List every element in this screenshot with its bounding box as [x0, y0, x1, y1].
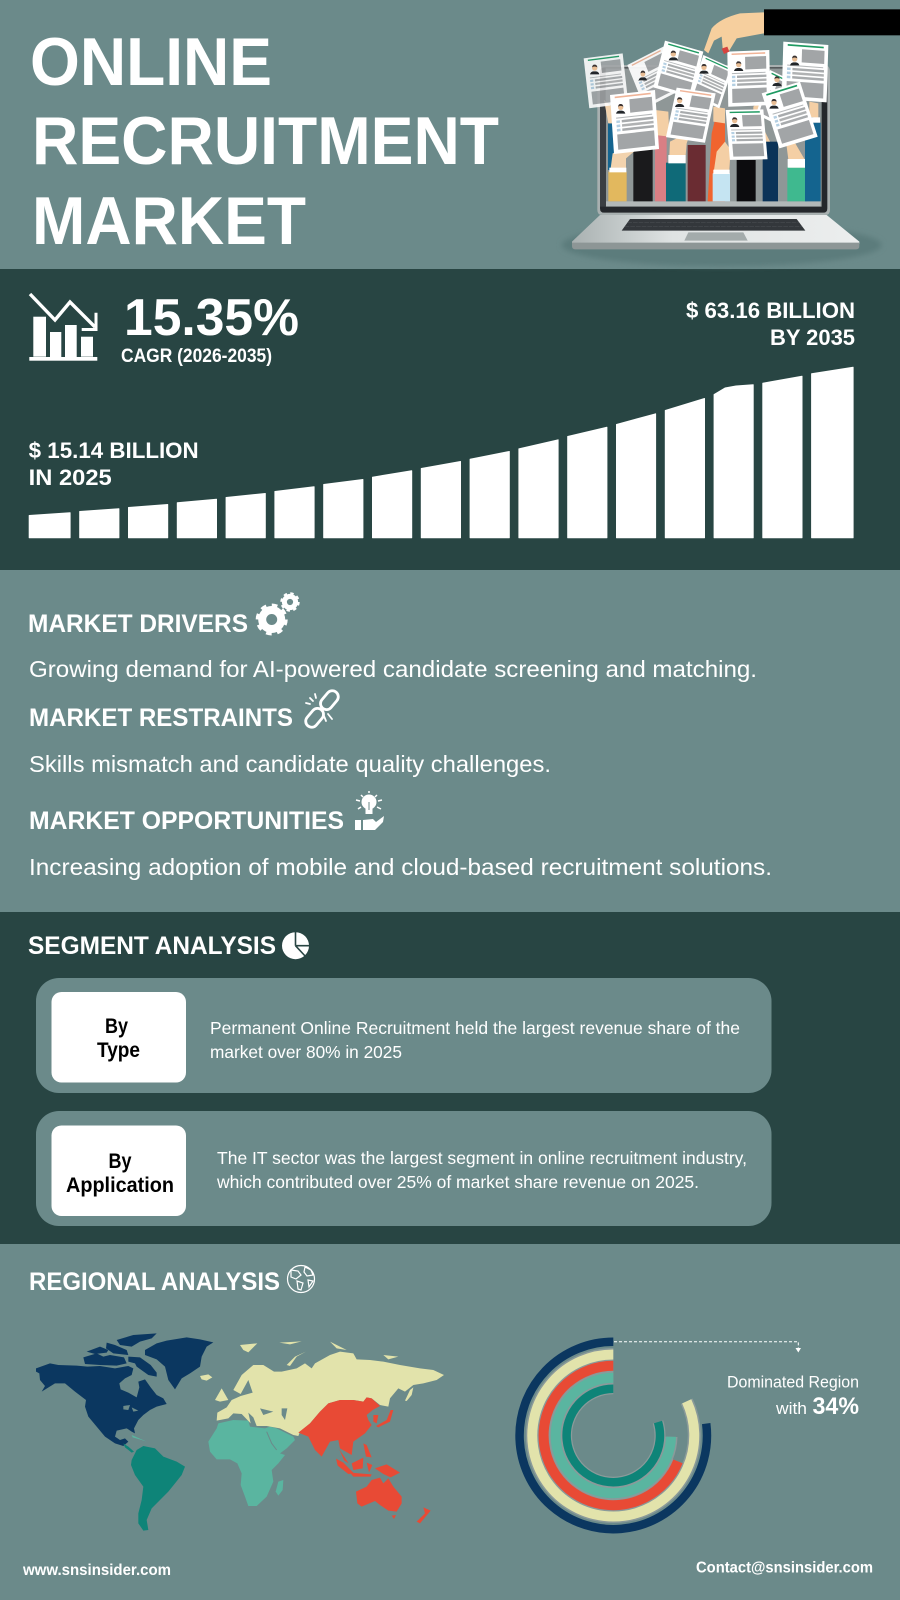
label box: by type: By	[105, 1015, 128, 1038]
heading: market opportunities: MARKET OPPORTUNITIES	[29, 807, 344, 835]
region: Asia Pacific	[298, 1397, 431, 1523]
heading: regional analysis: REGIONAL ANALYSIS	[29, 1268, 280, 1296]
heading: segment analysis: SEGMENT ANALYSIS	[28, 932, 276, 960]
icon: lightbulb in hand	[355, 791, 384, 830]
stat: CAGR: CAGR (2026-2035)	[121, 346, 272, 367]
callout: dominated region: Dominated Region	[727, 1372, 859, 1392]
title: ONLINE	[30, 24, 272, 100]
callout: dominated region: with	[775, 1399, 807, 1418]
label: 2035 market size: $ 63.16 BILLION	[686, 298, 855, 323]
label box: by application: By	[108, 1150, 132, 1173]
text: by type description	[210, 1018, 740, 1062]
label box: by application	[52, 1126, 186, 1216]
dark band: segment analysis	[0, 912, 900, 1244]
title: MARKET	[32, 183, 306, 259]
illustration: laptop with hands holding CVs	[562, 9, 900, 266]
region: Europe and Northern Asia	[200, 1341, 444, 1436]
label: 2035 market size	[686, 298, 855, 350]
ring: Europe	[532, 1354, 694, 1517]
panel: by application	[36, 1111, 772, 1226]
heading: market drivers: MARKET DRIVERS	[28, 610, 248, 638]
icon: gears	[258, 594, 298, 634]
radial bar chart: regional share	[520, 1342, 707, 1529]
icon: globe	[288, 1266, 314, 1292]
callout: dominated region: 34%	[812, 1393, 859, 1420]
text: market opportunity: Increasing adoption of mobile and cloud-based recruitment solutions.	[29, 854, 772, 880]
ring: Asia Pacific	[544, 1366, 678, 1505]
ring: South America	[567, 1389, 660, 1482]
footer: contact: Contact@snsinsider.com	[696, 1560, 873, 1576]
world map	[36, 1333, 444, 1531]
icon: broken chain	[303, 688, 341, 730]
label: 2025 market size: IN 2025	[29, 465, 112, 490]
label: 2025 market size	[29, 438, 199, 490]
footer: website: www.snsinsider.com	[22, 1562, 171, 1579]
label box: by type: Type	[97, 1039, 140, 1062]
text: market restraint: Skills mismatch and candidate quality challenges.	[29, 751, 551, 777]
text: by type description: Permanent Online Recruitment held the largest revenue share of the	[210, 1018, 740, 1038]
icon: pie chart	[282, 930, 311, 959]
label box: by type	[52, 992, 186, 1082]
stat: CAGR: 15.35%	[124, 289, 299, 347]
title: RECRUITMENT	[32, 103, 499, 179]
title	[30, 24, 499, 259]
region: Africa and Middle East	[132, 1420, 295, 1506]
panel: by type	[36, 978, 772, 1093]
label box: by application: Application	[66, 1174, 174, 1197]
dark band: market size	[0, 269, 900, 570]
ring: North America	[520, 1342, 707, 1529]
callout: dominated region	[727, 1372, 859, 1420]
ring: Middle East and Africa	[556, 1378, 671, 1493]
callout connector: dashed arrow	[614, 1342, 801, 1352]
region: South America	[123, 1443, 185, 1531]
label: 2035 market size: BY 2035	[770, 325, 855, 350]
text: by application description	[216, 1148, 747, 1192]
text: by application description: which contributed over 25% of market share revenue on 2025.	[216, 1172, 699, 1192]
bar chart: market growth	[29, 367, 853, 538]
icon: bar chart with trend arrow	[29, 294, 97, 361]
heading: market restraints: MARKET RESTRAINTS	[29, 704, 293, 732]
region: North America	[36, 1333, 213, 1446]
text: by application description: The IT sector was the largest segment in online recruitment industry,	[217, 1148, 747, 1168]
label: 2025 market size: $ 15.14 BILLION	[29, 438, 199, 463]
text: by type description: market over 80% in 2025	[210, 1042, 402, 1062]
text: market driver: Growing demand for AI-powered candidate screening and matching.	[29, 656, 757, 682]
